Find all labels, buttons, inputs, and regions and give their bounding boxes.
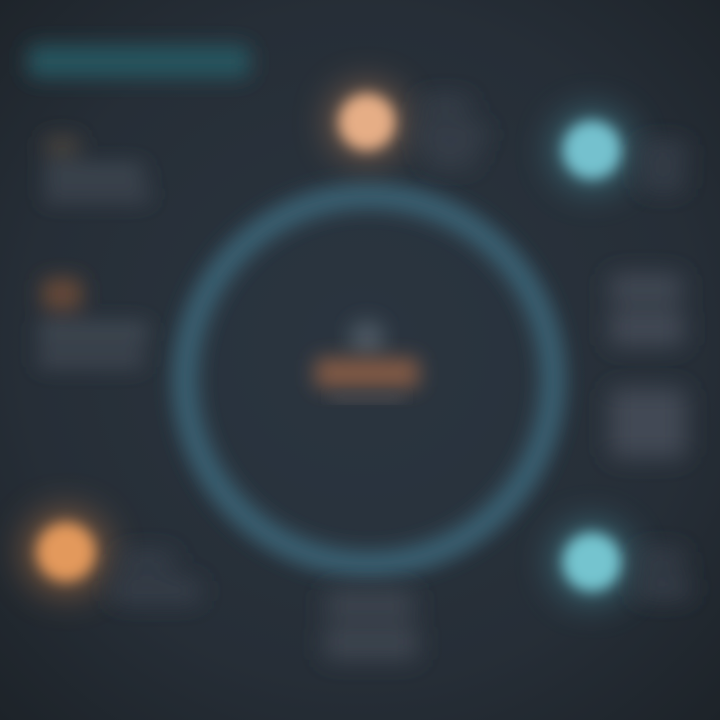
node: bottom left orange [24, 510, 108, 594]
text block: bottom right cyan [636, 550, 690, 598]
text block: bottom left orange [112, 552, 200, 602]
node: top peach [329, 84, 405, 160]
central ring [183, 194, 555, 566]
text block: upper left [44, 136, 150, 202]
text block: bottom center [324, 590, 418, 660]
title bar [28, 45, 250, 78]
center sublabel [330, 392, 404, 401]
text block: top peach [416, 98, 486, 166]
node: bottom right cyan [552, 522, 632, 602]
text block: right upper [610, 274, 684, 346]
node: top right cyan [552, 110, 632, 190]
text block: top right cyan [640, 143, 686, 190]
center icon [349, 320, 385, 356]
small accent label [44, 136, 80, 156]
center label [315, 358, 419, 388]
center content [315, 320, 419, 401]
text block: right lower [610, 388, 686, 458]
text block: middle left [38, 278, 148, 368]
orange accent label [42, 278, 82, 310]
